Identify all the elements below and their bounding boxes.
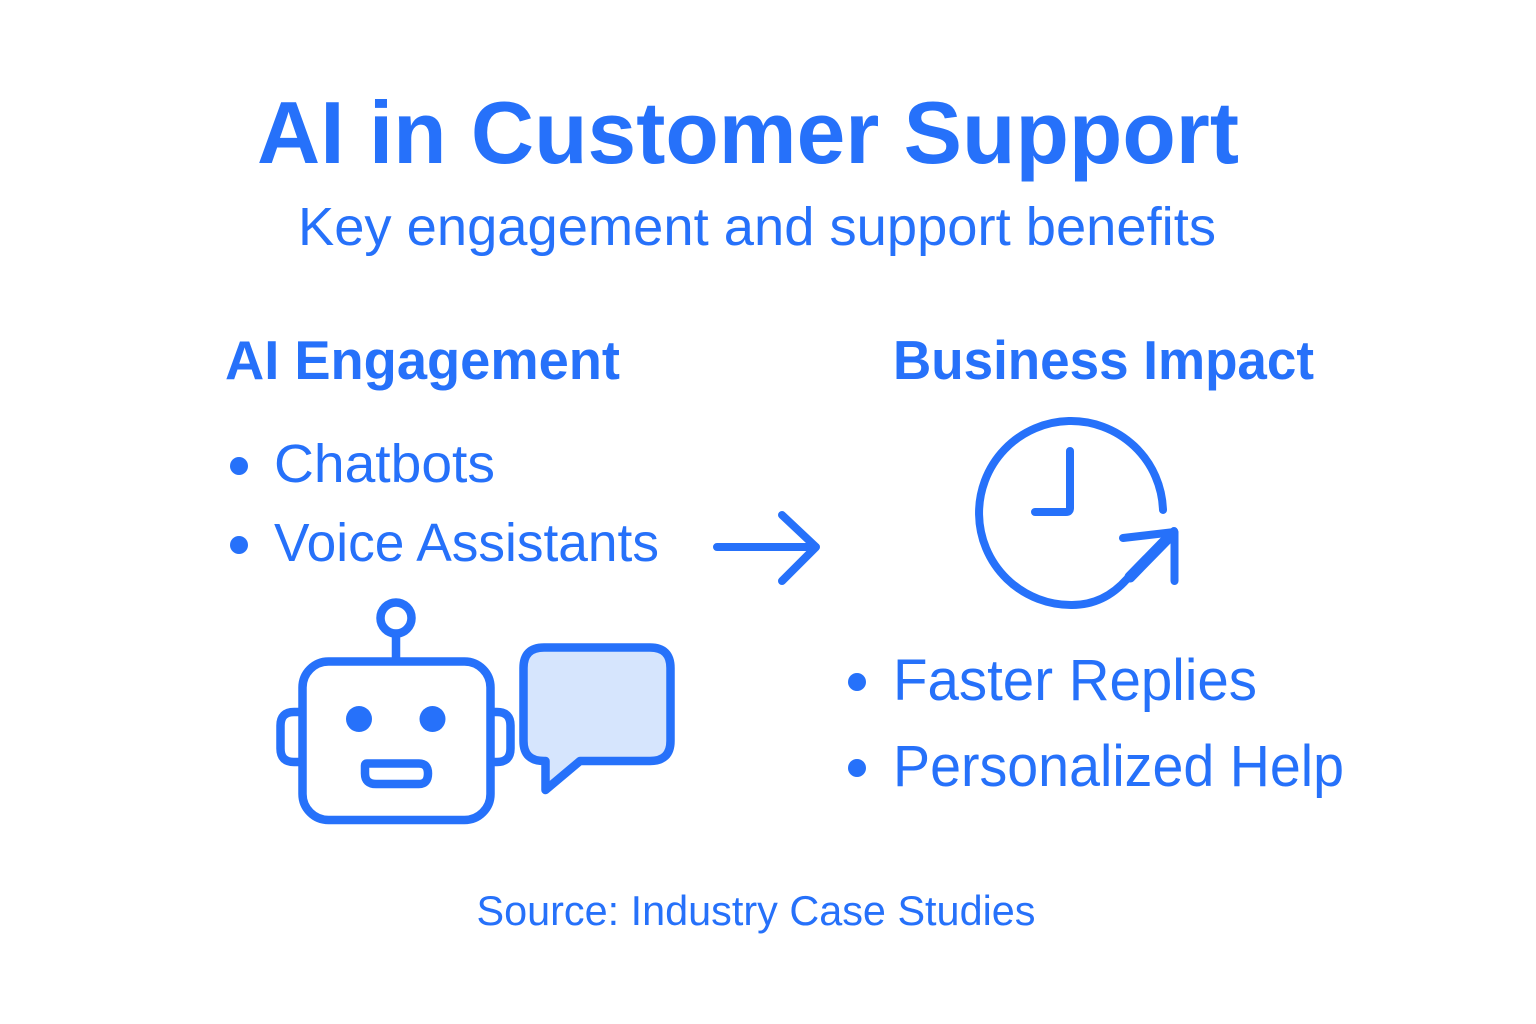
arrow: engagement to impact: [717, 515, 816, 581]
list item: Voice Assistants: Voice Assistants: [274, 513, 659, 573]
icon: robot: [280, 602, 510, 820]
list item: Personalized Help: Personalized Help: [893, 734, 1344, 799]
icon: speech bubble: [524, 648, 670, 790]
heading: AI Engagement: AI Engagement: [225, 329, 620, 391]
list item: Faster Replies: Faster Replies: [893, 648, 1257, 713]
source note: Source: Industry Case Studies: [476, 887, 1036, 934]
list item: Chatbots: Chatbots: [274, 434, 495, 494]
heading: Business Impact: Business Impact: [893, 329, 1314, 391]
panel: Business Impact: [848, 329, 1344, 799]
title: AI in Customer Support: [257, 83, 1239, 182]
panel: AI Engagement: [225, 329, 670, 820]
icon: clock with arrow: [979, 421, 1174, 605]
subtitle: Key engagement and support benefits: [298, 197, 1216, 257]
